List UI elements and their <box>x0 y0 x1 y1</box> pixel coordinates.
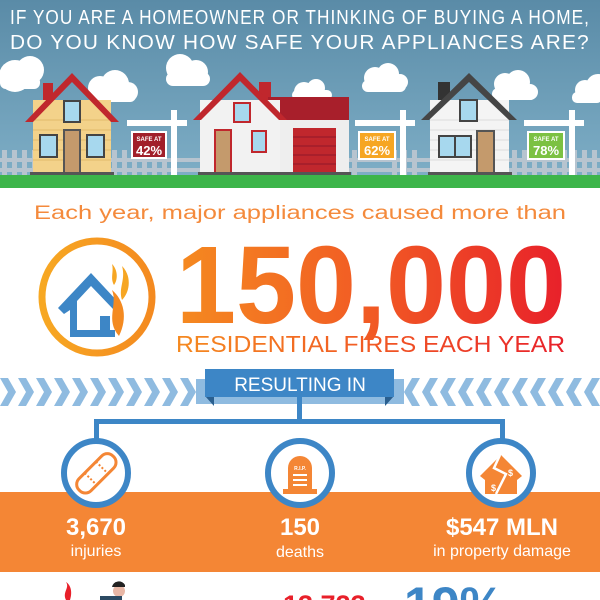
grass <box>0 175 600 188</box>
stat: injuries <box>66 518 125 560</box>
sign 78%: SAFE AT <box>534 137 559 143</box>
sign 62%: SAFE AT <box>364 137 390 143</box>
stat: deaths: 150 <box>280 514 320 541</box>
stat: property damage: in property damage <box>433 543 571 560</box>
fence <box>0 150 600 176</box>
banner: resulting in: RESULTING IN <box>234 375 366 396</box>
connector lines <box>94 397 505 443</box>
sky background <box>0 0 600 178</box>
clouds <box>0 54 600 103</box>
stat: deaths: deaths <box>276 544 324 561</box>
icon: house on fire in ring <box>42 241 152 353</box>
sign 62%: 62% <box>364 143 390 158</box>
house 1 (yellow) <box>25 73 119 176</box>
stat: deaths <box>276 518 324 557</box>
stat: property damage: $547 MLN <box>446 514 558 541</box>
house 3 (white, grey roof) <box>421 73 517 176</box>
sign 78% <box>524 110 584 176</box>
sign 42%: SAFE AT <box>136 137 162 143</box>
sign 78%: 78% <box>533 143 559 158</box>
icon: bandage <box>64 441 128 505</box>
sign 42%: 42% <box>136 143 162 158</box>
icon: tombstone <box>268 441 332 505</box>
banner: resulting in <box>205 369 394 406</box>
bottom partial row: icons <box>65 581 125 600</box>
icon: damaged house: $ <box>491 483 496 493</box>
bottom partial row: numbers <box>284 587 496 600</box>
intro text: Each year, major appliances caused more than <box>34 203 566 224</box>
icon: tombstone: R.I.P. <box>294 466 307 472</box>
house 2 (white with garage) <box>193 72 351 176</box>
title <box>12 10 588 49</box>
chevron band <box>0 378 600 406</box>
title: DO YOU KNOW HOW SAFE YOUR APPLIANCES ARE? <box>10 32 590 54</box>
stat: injuries: 3,670 <box>66 514 126 541</box>
stat: property damage <box>433 514 571 560</box>
icon: damaged house: $ <box>508 468 513 478</box>
icon: damaged house <box>469 441 533 505</box>
orange stats band <box>0 492 600 572</box>
sign 62% <box>355 110 415 176</box>
sign 42% <box>127 110 187 176</box>
big number: 150,000 <box>176 224 566 347</box>
subheading: RESIDENTIAL FIRES EACH YEAR <box>176 331 565 357</box>
stat: injuries: injuries <box>71 543 121 560</box>
